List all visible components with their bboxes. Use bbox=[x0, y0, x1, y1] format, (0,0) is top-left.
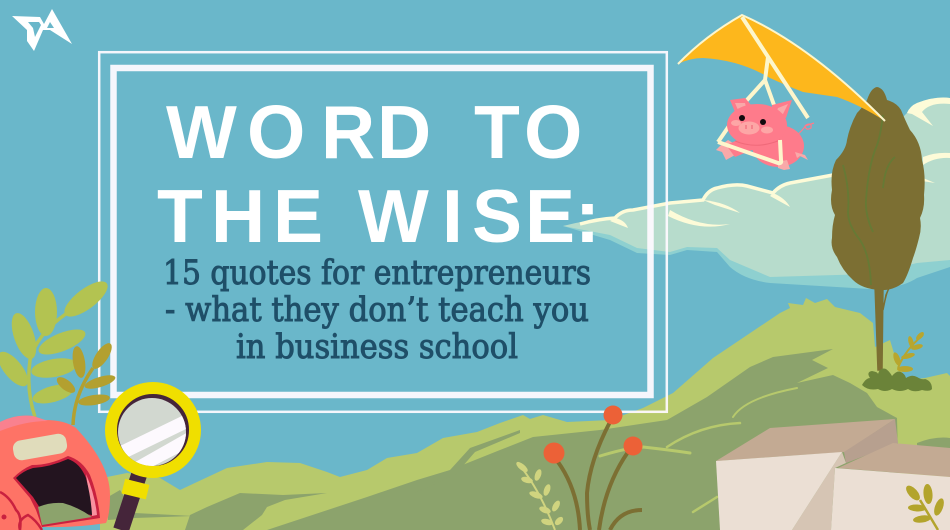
shadow patch left bbox=[185, 493, 327, 530]
left rock side bbox=[844, 419, 898, 463]
lens glare bbox=[120, 416, 186, 466]
glider rods bbox=[742, 17, 808, 118]
tree bbox=[831, 87, 925, 370]
right rock top bbox=[838, 443, 950, 477]
title line 1: WORD TO bbox=[166, 90, 582, 174]
cloud bbox=[563, 98, 950, 289]
shadow under helmet bbox=[108, 490, 193, 520]
helmet dots bbox=[2, 514, 6, 520]
shadow patch right bbox=[917, 438, 950, 450]
flowers bbox=[544, 406, 642, 530]
shadow streak bbox=[413, 430, 520, 494]
pig nostrils bbox=[746, 125, 752, 129]
helmet opening bbox=[16, 459, 92, 515]
tree trunk bbox=[875, 285, 889, 370]
hills bbox=[100, 298, 950, 530]
pig tail bbox=[796, 123, 814, 136]
helmet ear guard bbox=[0, 492, 42, 530]
olive plant bbox=[0, 275, 113, 417]
left rock shadow face bbox=[792, 452, 846, 530]
title frame bbox=[99, 52, 667, 412]
hang glider bbox=[678, 15, 885, 142]
plant on rock bbox=[904, 483, 946, 530]
pig ears bbox=[730, 98, 792, 118]
plant near tree bbox=[892, 331, 925, 372]
logo bbox=[12, 9, 72, 51]
pig snout bbox=[738, 122, 760, 134]
hill seen through helmet bbox=[38, 503, 92, 525]
pig body bbox=[752, 125, 804, 167]
rocks bbox=[716, 419, 950, 530]
grass strokes bbox=[600, 388, 797, 512]
flower stems bbox=[558, 422, 642, 530]
subtitle line 3: in business school bbox=[236, 327, 518, 367]
pig chin line bbox=[735, 140, 780, 145]
helmet bbox=[0, 416, 110, 530]
fern bbox=[515, 460, 565, 530]
right rock front bbox=[831, 468, 950, 530]
flower heads bbox=[604, 406, 622, 424]
dark green hill shadow bbox=[267, 349, 900, 530]
left rock top bbox=[716, 419, 895, 461]
pig head bbox=[727, 104, 787, 146]
subtitle line 1: 15 quotes for entrepreneurs bbox=[163, 253, 591, 293]
helmet inner highlight bbox=[86, 474, 97, 516]
tree veins bbox=[843, 115, 895, 285]
control bar in front of pig bbox=[718, 140, 781, 163]
magnifier handle bbox=[121, 475, 139, 530]
title line 2: THE WISE: bbox=[157, 174, 600, 258]
magnifier ring bbox=[111, 388, 195, 472]
subtitle line 2: - what they don’t teach you bbox=[165, 290, 589, 330]
left rock front bbox=[716, 452, 842, 530]
light green hillside bbox=[100, 298, 950, 530]
glider wing bbox=[678, 15, 885, 121]
magnifier collar bbox=[122, 479, 149, 499]
helmet shell bbox=[0, 416, 110, 530]
inner frame bbox=[114, 68, 650, 395]
title bbox=[157, 90, 600, 258]
pig eyes bbox=[739, 115, 745, 121]
outer frame bbox=[99, 52, 667, 412]
gold plant bbox=[54, 340, 117, 425]
pig cheeks bbox=[731, 120, 741, 126]
tree crown bbox=[831, 87, 925, 290]
subtitle bbox=[163, 253, 591, 367]
helmet top stripe bbox=[0, 416, 48, 431]
magnifying glass bbox=[111, 388, 195, 530]
helmet opening rim bbox=[13, 456, 100, 527]
pig bbox=[716, 98, 814, 170]
glider leading edge bbox=[678, 15, 885, 121]
bush at tree base bbox=[862, 369, 932, 391]
pig feet bbox=[716, 140, 808, 170]
lens edge bbox=[115, 392, 191, 468]
pig arm bbox=[726, 137, 775, 157]
lens glass bbox=[118, 398, 186, 466]
helmet visor pad bbox=[12, 432, 68, 462]
